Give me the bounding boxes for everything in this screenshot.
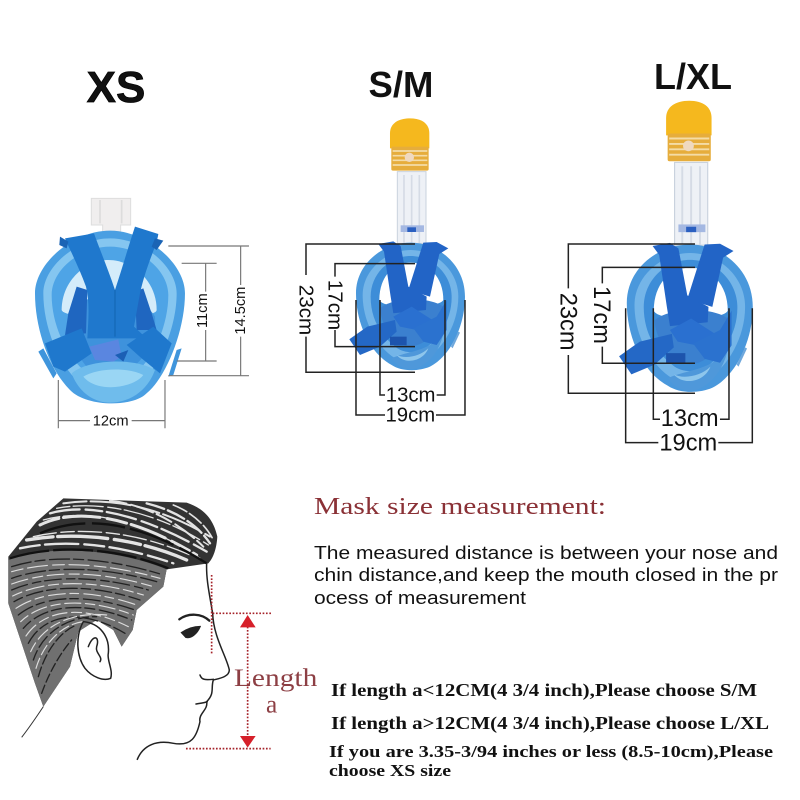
text block: size recommendations: choose XS size — [329, 761, 452, 780]
text block: size recommendations — [329, 680, 774, 780]
dimension: 23cm: 23cm — [294, 285, 317, 335]
text block: size recommendations: If you are 3.35-3/94 inches or less (8.5-10cm),Please — [329, 742, 774, 761]
dimension: 13cm: 13cm — [661, 406, 719, 432]
dimension: 12cm — [58, 380, 165, 430]
text block: measurement description: chin distance,and keep the mouth closed in the pr — [314, 565, 778, 585]
dimension: 14.5cm — [168, 246, 249, 376]
text block: measurement description: The measured distance is between your nose and — [314, 543, 778, 563]
dimension: 13cm: 13cm — [386, 385, 436, 407]
dimension: 19cm: 19cm — [385, 405, 435, 427]
dimension: 23cm — [294, 244, 415, 372]
heading: XS: XS — [87, 63, 145, 112]
text block: measurement description — [314, 543, 778, 608]
label: Length a — [234, 664, 318, 719]
panel: S/M mask with dimensions — [294, 118, 465, 427]
icon: S/M mask — [349, 118, 465, 370]
face outline — [78, 563, 229, 759]
hair — [8, 498, 217, 737]
arrow: top — [240, 615, 256, 627]
measurement: red dotted lines — [186, 575, 272, 749]
text block: measurement description: ocess of measurement — [314, 588, 526, 608]
icon: XS mask — [35, 198, 185, 403]
panel: L/XL mask with dimensions — [555, 101, 753, 456]
dimension: 11cm — [177, 263, 217, 361]
icon: L/XL mask — [619, 101, 753, 392]
dimension: 23cm — [555, 244, 695, 393]
dimension: 17cm: 17cm — [323, 280, 346, 330]
dimension: 11cm: 11cm — [195, 293, 211, 328]
heading: S/M: S/M — [369, 64, 433, 105]
dimension: 19cm: 19cm — [659, 430, 717, 456]
dimension: 12cm: 12cm — [93, 414, 129, 430]
text block: size recommendations: If length a<12CM(4 3/4 inch),Please choose S/M — [331, 680, 757, 700]
panel: XS mask with dimensions — [35, 198, 249, 430]
label: Length a: a — [266, 691, 277, 719]
dimension: 17cm — [323, 264, 415, 347]
arrow: bottom — [240, 736, 256, 748]
dimension: 23cm: 23cm — [555, 293, 581, 351]
heading: mask size measurement: Mask size measurement: — [314, 494, 606, 520]
dimension: 14.5cm: 14.5cm — [233, 287, 249, 335]
dimension: 13cm — [653, 308, 729, 432]
dimension: 19cm — [626, 308, 752, 456]
label: Length a: Length — [234, 664, 318, 692]
dimension: 17cm: 17cm — [588, 286, 614, 344]
dimension: 13cm — [380, 300, 445, 407]
dimension: 17cm — [588, 267, 695, 363]
illustration: head profile with length measurement — [8, 498, 318, 759]
dimension: 19cm — [356, 300, 465, 427]
heading: L/XL: L/XL — [654, 56, 732, 97]
text block: size recommendations: If length a>12CM(4 3/4 inch),Please choose L/XL — [331, 713, 769, 733]
